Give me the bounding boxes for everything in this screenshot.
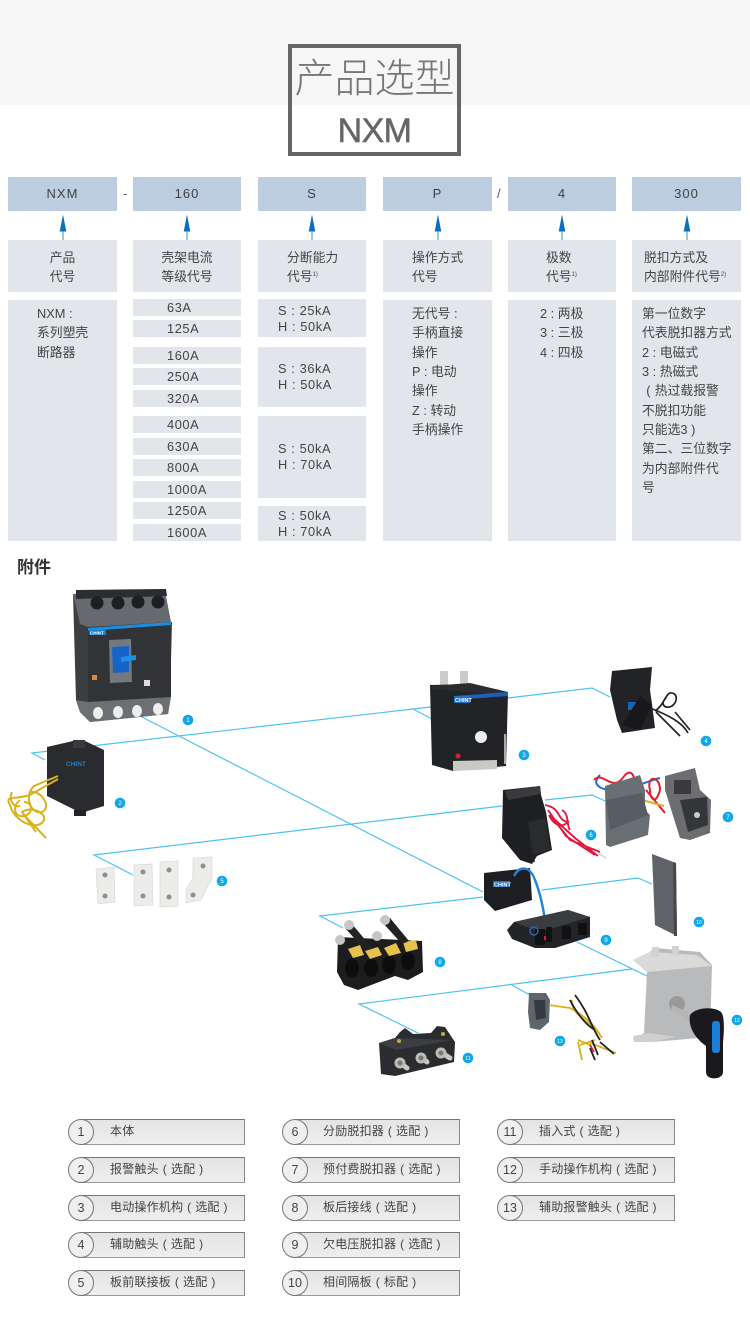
detail: operation mode: P : 电动 bbox=[412, 364, 457, 379]
detail: release: 热过载报警 bbox=[655, 383, 719, 398]
badge 3: 3 bbox=[522, 753, 526, 759]
label: frame current: 壳架电流 bbox=[161, 250, 213, 265]
legend item 1: 本体 bbox=[110, 1124, 134, 1138]
legend item 3: ) bbox=[224, 1200, 228, 1214]
rating 160A: 160A bbox=[167, 348, 199, 363]
label: operation mode bbox=[383, 240, 492, 292]
legend item 2: ( bbox=[163, 1162, 167, 1176]
legend item 5: 5 bbox=[78, 1276, 84, 1290]
rating 1600A bbox=[133, 524, 241, 541]
model code: S: S bbox=[307, 186, 317, 201]
model code: 4: 4 bbox=[558, 186, 566, 201]
model code: 4 bbox=[508, 177, 616, 211]
legend item 7: ( bbox=[400, 1162, 404, 1176]
badge 9 bbox=[601, 935, 611, 945]
badge 7: 7 bbox=[726, 815, 730, 821]
6 shunt release bbox=[502, 786, 606, 864]
legend item 7: 预付费脱扣器 选配 bbox=[323, 1162, 433, 1176]
legend item 8: ) bbox=[412, 1200, 416, 1214]
legend item 6: 分励脱扣器 选配 bbox=[323, 1124, 420, 1138]
label: operation mode: 代号 bbox=[412, 269, 438, 284]
separator dash: - bbox=[123, 186, 127, 201]
model code: S bbox=[258, 177, 366, 211]
legend item 7 bbox=[282, 1157, 460, 1183]
legend item 11: 11 bbox=[504, 1125, 516, 1139]
model code: P bbox=[383, 177, 492, 211]
badge 6 bbox=[586, 830, 596, 840]
legend item 1: 1 bbox=[78, 1125, 84, 1139]
rating 400A bbox=[133, 416, 241, 433]
legend item 7: 7 bbox=[292, 1163, 298, 1177]
model code: NXM: NXM bbox=[47, 186, 78, 201]
legend item 9: 欠电压脱扣器 选配 bbox=[323, 1237, 433, 1251]
detail: poles: 3 : 三极 bbox=[540, 325, 583, 340]
9 undervoltage release: CHINT bbox=[494, 882, 511, 888]
arrow 4 bbox=[434, 214, 442, 240]
legend item 5: ( bbox=[175, 1275, 179, 1289]
detail: operation mode: Z : 转动 bbox=[412, 403, 456, 418]
breaking capacity block 3: S : 50kA bbox=[278, 441, 331, 456]
legend item 4: ( bbox=[163, 1237, 167, 1251]
badge 13 bbox=[555, 1036, 565, 1046]
11 plug-in type base bbox=[379, 1026, 455, 1076]
detail: product code bbox=[8, 300, 117, 541]
rating 250A bbox=[133, 368, 241, 385]
arrow 6 bbox=[684, 214, 690, 240]
legend item 2: 报警触头 选配 bbox=[110, 1162, 195, 1176]
arrow 5 bbox=[558, 214, 566, 240]
badge 13: 13 bbox=[557, 1039, 563, 1045]
2 alarm contact: CHINT bbox=[66, 761, 86, 768]
model code: P: P bbox=[433, 186, 442, 201]
legend item 2: ) bbox=[199, 1162, 203, 1176]
badge 4 bbox=[701, 736, 711, 746]
rating 1000A bbox=[133, 481, 241, 498]
badge 1: 1 bbox=[186, 718, 190, 724]
legend item 13 bbox=[497, 1195, 675, 1221]
legend item 8: 8 bbox=[292, 1201, 298, 1215]
detail: release: 代表脱扣器方式 bbox=[642, 325, 732, 340]
rating 800A: 800A bbox=[167, 460, 199, 475]
legend item 4: 辅助触头 选配 bbox=[110, 1237, 195, 1251]
badge 12 bbox=[732, 1015, 742, 1025]
legend item 8: 板后接线 选配 bbox=[323, 1200, 408, 1214]
label: release and accessories: 脱扣方式及 bbox=[644, 250, 708, 265]
breaking capacity block 4: S : 50kA bbox=[278, 508, 331, 523]
label: poles: 代号1) bbox=[546, 269, 577, 284]
model code: 300 bbox=[632, 177, 741, 211]
header band bbox=[0, 0, 750, 105]
detail: release: 不脱扣功能 bbox=[642, 403, 706, 418]
rating 320A: 320A bbox=[167, 391, 199, 406]
2 alarm contact bbox=[8, 740, 104, 838]
label: product code bbox=[8, 240, 117, 292]
legend item 2: 2 bbox=[78, 1163, 84, 1177]
detail: product code: 系列塑壳 bbox=[37, 325, 88, 340]
7 prepaid release bbox=[594, 768, 711, 847]
10 phase barrier bbox=[652, 854, 677, 936]
legend item 11: ) bbox=[616, 1124, 620, 1138]
label: operation mode: 操作方式 bbox=[412, 250, 463, 265]
12 manual operating mechanism bbox=[633, 946, 724, 1078]
exploded accessories diagram bbox=[7, 589, 742, 1078]
rating 250A: 250A bbox=[167, 369, 199, 384]
detail: poles: 4 : 四极 bbox=[540, 345, 583, 360]
legend item 4: ) bbox=[199, 1237, 203, 1251]
arrow 2 bbox=[184, 214, 190, 240]
label: product code: 代号 bbox=[50, 269, 75, 284]
badge 3 bbox=[519, 750, 529, 760]
rating 800A bbox=[133, 459, 241, 476]
legend item 8: ( bbox=[376, 1200, 380, 1214]
rating 1000A: 1000A bbox=[167, 482, 207, 497]
badge 4: 4 bbox=[704, 739, 708, 745]
detail: operation mode: 操作 bbox=[412, 383, 438, 398]
legend item 3: 电动操作机构 选配 bbox=[110, 1200, 220, 1214]
rating 630A bbox=[133, 438, 241, 455]
breaking capacity block 3: H : 70kA bbox=[278, 457, 332, 472]
legend item 4: 4 bbox=[78, 1238, 84, 1252]
label: release and accessories: 内部附件代号2) bbox=[644, 269, 726, 284]
rating 125A: 125A bbox=[167, 321, 199, 336]
breaking capacity block 4 bbox=[258, 506, 366, 541]
badge 9: 9 bbox=[604, 938, 608, 944]
13 auxiliary alarm contact bbox=[528, 993, 616, 1060]
legend item 1 bbox=[68, 1119, 245, 1145]
breaking capacity block 1: H : 50kA bbox=[278, 319, 332, 334]
badge 12: 12 bbox=[734, 1018, 740, 1024]
legend item 11: 插入式 选配 bbox=[539, 1124, 612, 1138]
badge 2 bbox=[115, 798, 125, 808]
3 electric operating mechanism bbox=[430, 671, 508, 771]
rating 320A bbox=[133, 390, 241, 407]
label: frame current: 等级代号 bbox=[161, 269, 213, 284]
5 busbar connection plates bbox=[96, 857, 212, 907]
detail: poles: 2 : 两极 bbox=[540, 306, 583, 321]
detail: release bbox=[632, 300, 741, 541]
model code: 160: 160 bbox=[175, 186, 199, 201]
number badges bbox=[115, 715, 742, 1063]
legend item 13: ) bbox=[652, 1200, 657, 1214]
badge 2: 2 bbox=[118, 801, 122, 807]
legend item 12 bbox=[497, 1157, 675, 1183]
label: product code: 产品 bbox=[50, 250, 75, 265]
breaking capacity block 3 bbox=[258, 416, 366, 498]
detail: product code: 断路器 bbox=[37, 345, 75, 360]
legend item 12: ( bbox=[616, 1162, 620, 1176]
detail: release: ( bbox=[646, 383, 651, 398]
rating 1600A: 1600A bbox=[167, 525, 207, 540]
legend item 6: ) bbox=[424, 1124, 429, 1138]
heading: accessories: 附件 bbox=[17, 558, 51, 577]
detail: operation mode: 手柄操作 bbox=[412, 422, 463, 437]
1 circuit breaker bbox=[73, 589, 172, 722]
label: poles bbox=[508, 240, 616, 292]
breaking capacity block 1: S : 25kA bbox=[278, 303, 331, 318]
title box: NXM bbox=[338, 112, 411, 150]
badge 10: 10 bbox=[696, 920, 702, 926]
1 circuit breaker: CHINT bbox=[90, 630, 104, 636]
legend item 9 bbox=[282, 1232, 460, 1258]
title box bbox=[288, 44, 461, 156]
rating 125A bbox=[133, 320, 241, 337]
legend item 10: ) bbox=[412, 1275, 416, 1289]
legend item 6: ( bbox=[388, 1124, 392, 1138]
legend item 2 bbox=[68, 1157, 245, 1183]
detail: poles bbox=[508, 300, 616, 541]
model code: 300: 300 bbox=[674, 186, 699, 201]
rating 400A: 400A bbox=[167, 417, 199, 432]
legend item 12: ) bbox=[652, 1162, 657, 1176]
legend item 10: ( bbox=[376, 1275, 380, 1289]
legend item 5 bbox=[68, 1270, 245, 1296]
badge 6: 6 bbox=[589, 833, 593, 839]
breaking capacity block 4: H : 70kA bbox=[278, 524, 332, 539]
badge 7 bbox=[723, 812, 733, 822]
legend item 9: 9 bbox=[292, 1238, 298, 1252]
detail: operation mode: 操作 bbox=[412, 345, 438, 360]
detail: release: 2 : 电磁式 bbox=[642, 345, 698, 360]
label: release and accessories bbox=[632, 240, 741, 292]
legend item 7: ) bbox=[436, 1162, 441, 1176]
detail: release: 只能选3 ) bbox=[642, 422, 695, 437]
8 rear connection block bbox=[335, 915, 423, 990]
legend item 13: ( bbox=[616, 1200, 620, 1214]
badge 11 bbox=[463, 1053, 473, 1063]
badge 5: 5 bbox=[220, 879, 224, 885]
model code: NXM bbox=[8, 177, 117, 211]
breaking capacity block 1 bbox=[258, 299, 366, 337]
legend item 13: 辅助报警触头 选配 bbox=[539, 1200, 649, 1214]
label: frame current bbox=[133, 240, 241, 292]
4 auxiliary contact bbox=[610, 667, 690, 736]
rating 160A bbox=[133, 347, 241, 364]
badge 11: 11 bbox=[465, 1056, 471, 1062]
arrow 3 bbox=[308, 214, 316, 240]
legend item 9: ( bbox=[400, 1237, 404, 1251]
detail: product code: NXM : bbox=[37, 306, 73, 321]
model code: 160 bbox=[133, 177, 241, 211]
detail rows: current ratings bbox=[133, 299, 241, 541]
label: breaking capacity: 代号1) bbox=[287, 269, 318, 284]
label: breaking capacity bbox=[258, 240, 366, 292]
breaking capacity block 2 bbox=[258, 347, 366, 407]
9 undervoltage release bbox=[484, 868, 590, 948]
legend item 11 bbox=[497, 1119, 675, 1145]
legend item 10: 10 bbox=[288, 1276, 302, 1290]
legend item 6: 6 bbox=[292, 1125, 298, 1139]
legend item 3: ( bbox=[187, 1200, 191, 1214]
rating 630A: 630A bbox=[167, 439, 199, 454]
detail: release: 第二、三位数字 bbox=[642, 441, 732, 456]
detail: operation mode bbox=[383, 300, 492, 541]
separator slash: / bbox=[497, 186, 501, 201]
legend item 10 bbox=[282, 1270, 460, 1296]
label: breaking capacity: 分断能力 bbox=[287, 250, 338, 265]
rating 1250A: 1250A bbox=[167, 503, 207, 518]
detail: operation mode: 手柄直接 bbox=[412, 325, 463, 340]
detail: release: 号 bbox=[642, 480, 655, 495]
breaking capacity block 2: S : 36kA bbox=[278, 361, 331, 376]
title box: 产品选型 bbox=[294, 57, 454, 101]
legend item 4 bbox=[68, 1232, 245, 1258]
legend item 5: ) bbox=[211, 1275, 216, 1289]
legend item 12: 手动操作机构 选配 bbox=[539, 1162, 649, 1176]
badge 5 bbox=[217, 876, 227, 886]
legend item 5: 板前联接板 选配 bbox=[110, 1275, 207, 1289]
label: poles: 极数 bbox=[546, 250, 572, 265]
legend item 8 bbox=[282, 1195, 460, 1221]
legend item 10: 相间隔板 标配 bbox=[323, 1275, 408, 1289]
rating 63A: 63A bbox=[167, 300, 192, 315]
legend item 11: ( bbox=[580, 1124, 584, 1138]
detail: release: 为内部附件代 bbox=[642, 461, 719, 476]
legend item 3 bbox=[68, 1195, 245, 1221]
3 electric operating mechanism: CHINT bbox=[455, 698, 472, 704]
badge 8: 8 bbox=[438, 960, 442, 966]
badge 1 bbox=[183, 715, 193, 725]
legend item 6 bbox=[282, 1119, 460, 1145]
detail: operation mode: 无代号 : bbox=[412, 306, 458, 321]
legend item 12: 12 bbox=[503, 1163, 517, 1177]
rating 1250A bbox=[133, 502, 241, 519]
legend item 3: 3 bbox=[78, 1201, 84, 1215]
connector lines bbox=[32, 688, 652, 1033]
badge 8 bbox=[435, 957, 445, 967]
detail: release: 第一位数字 bbox=[642, 306, 706, 321]
rating 63A bbox=[133, 299, 241, 316]
breaking capacity block 2: H : 50kA bbox=[278, 377, 332, 392]
badge 10 bbox=[694, 917, 704, 927]
legend item 9: ) bbox=[436, 1237, 441, 1251]
detail: release: 3 : 热磁式 bbox=[642, 364, 698, 379]
arrow 1 bbox=[60, 214, 66, 240]
legend item 13: 13 bbox=[503, 1201, 517, 1215]
